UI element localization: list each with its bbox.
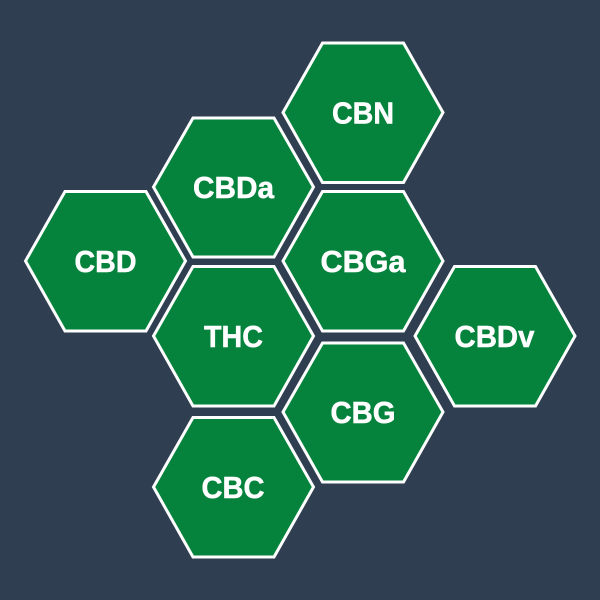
hexagon: CBC <box>154 418 314 557</box>
hexagon: THC: THC <box>204 320 263 354</box>
hexagon: CBDa <box>154 118 314 257</box>
hexagon: CBN: CBN <box>332 96 394 130</box>
hexagon: CBD: CBD <box>74 245 136 279</box>
hexagon: CBDv: CBDv <box>454 320 535 354</box>
hexagon: CBDa: CBDa <box>193 171 275 205</box>
hexagon: CBG: CBG <box>330 396 396 430</box>
hexagon: CBDv <box>415 266 575 406</box>
hexagon: CBD <box>26 192 186 331</box>
hexagon: CBN <box>283 43 443 182</box>
hexagon: CBG <box>283 343 443 482</box>
hexagon: CBGa: CBGa <box>320 245 407 279</box>
hexagon: THC <box>154 266 314 406</box>
hexagon: CBGa <box>283 192 443 331</box>
hexagon: CBC: CBC <box>202 471 264 505</box>
